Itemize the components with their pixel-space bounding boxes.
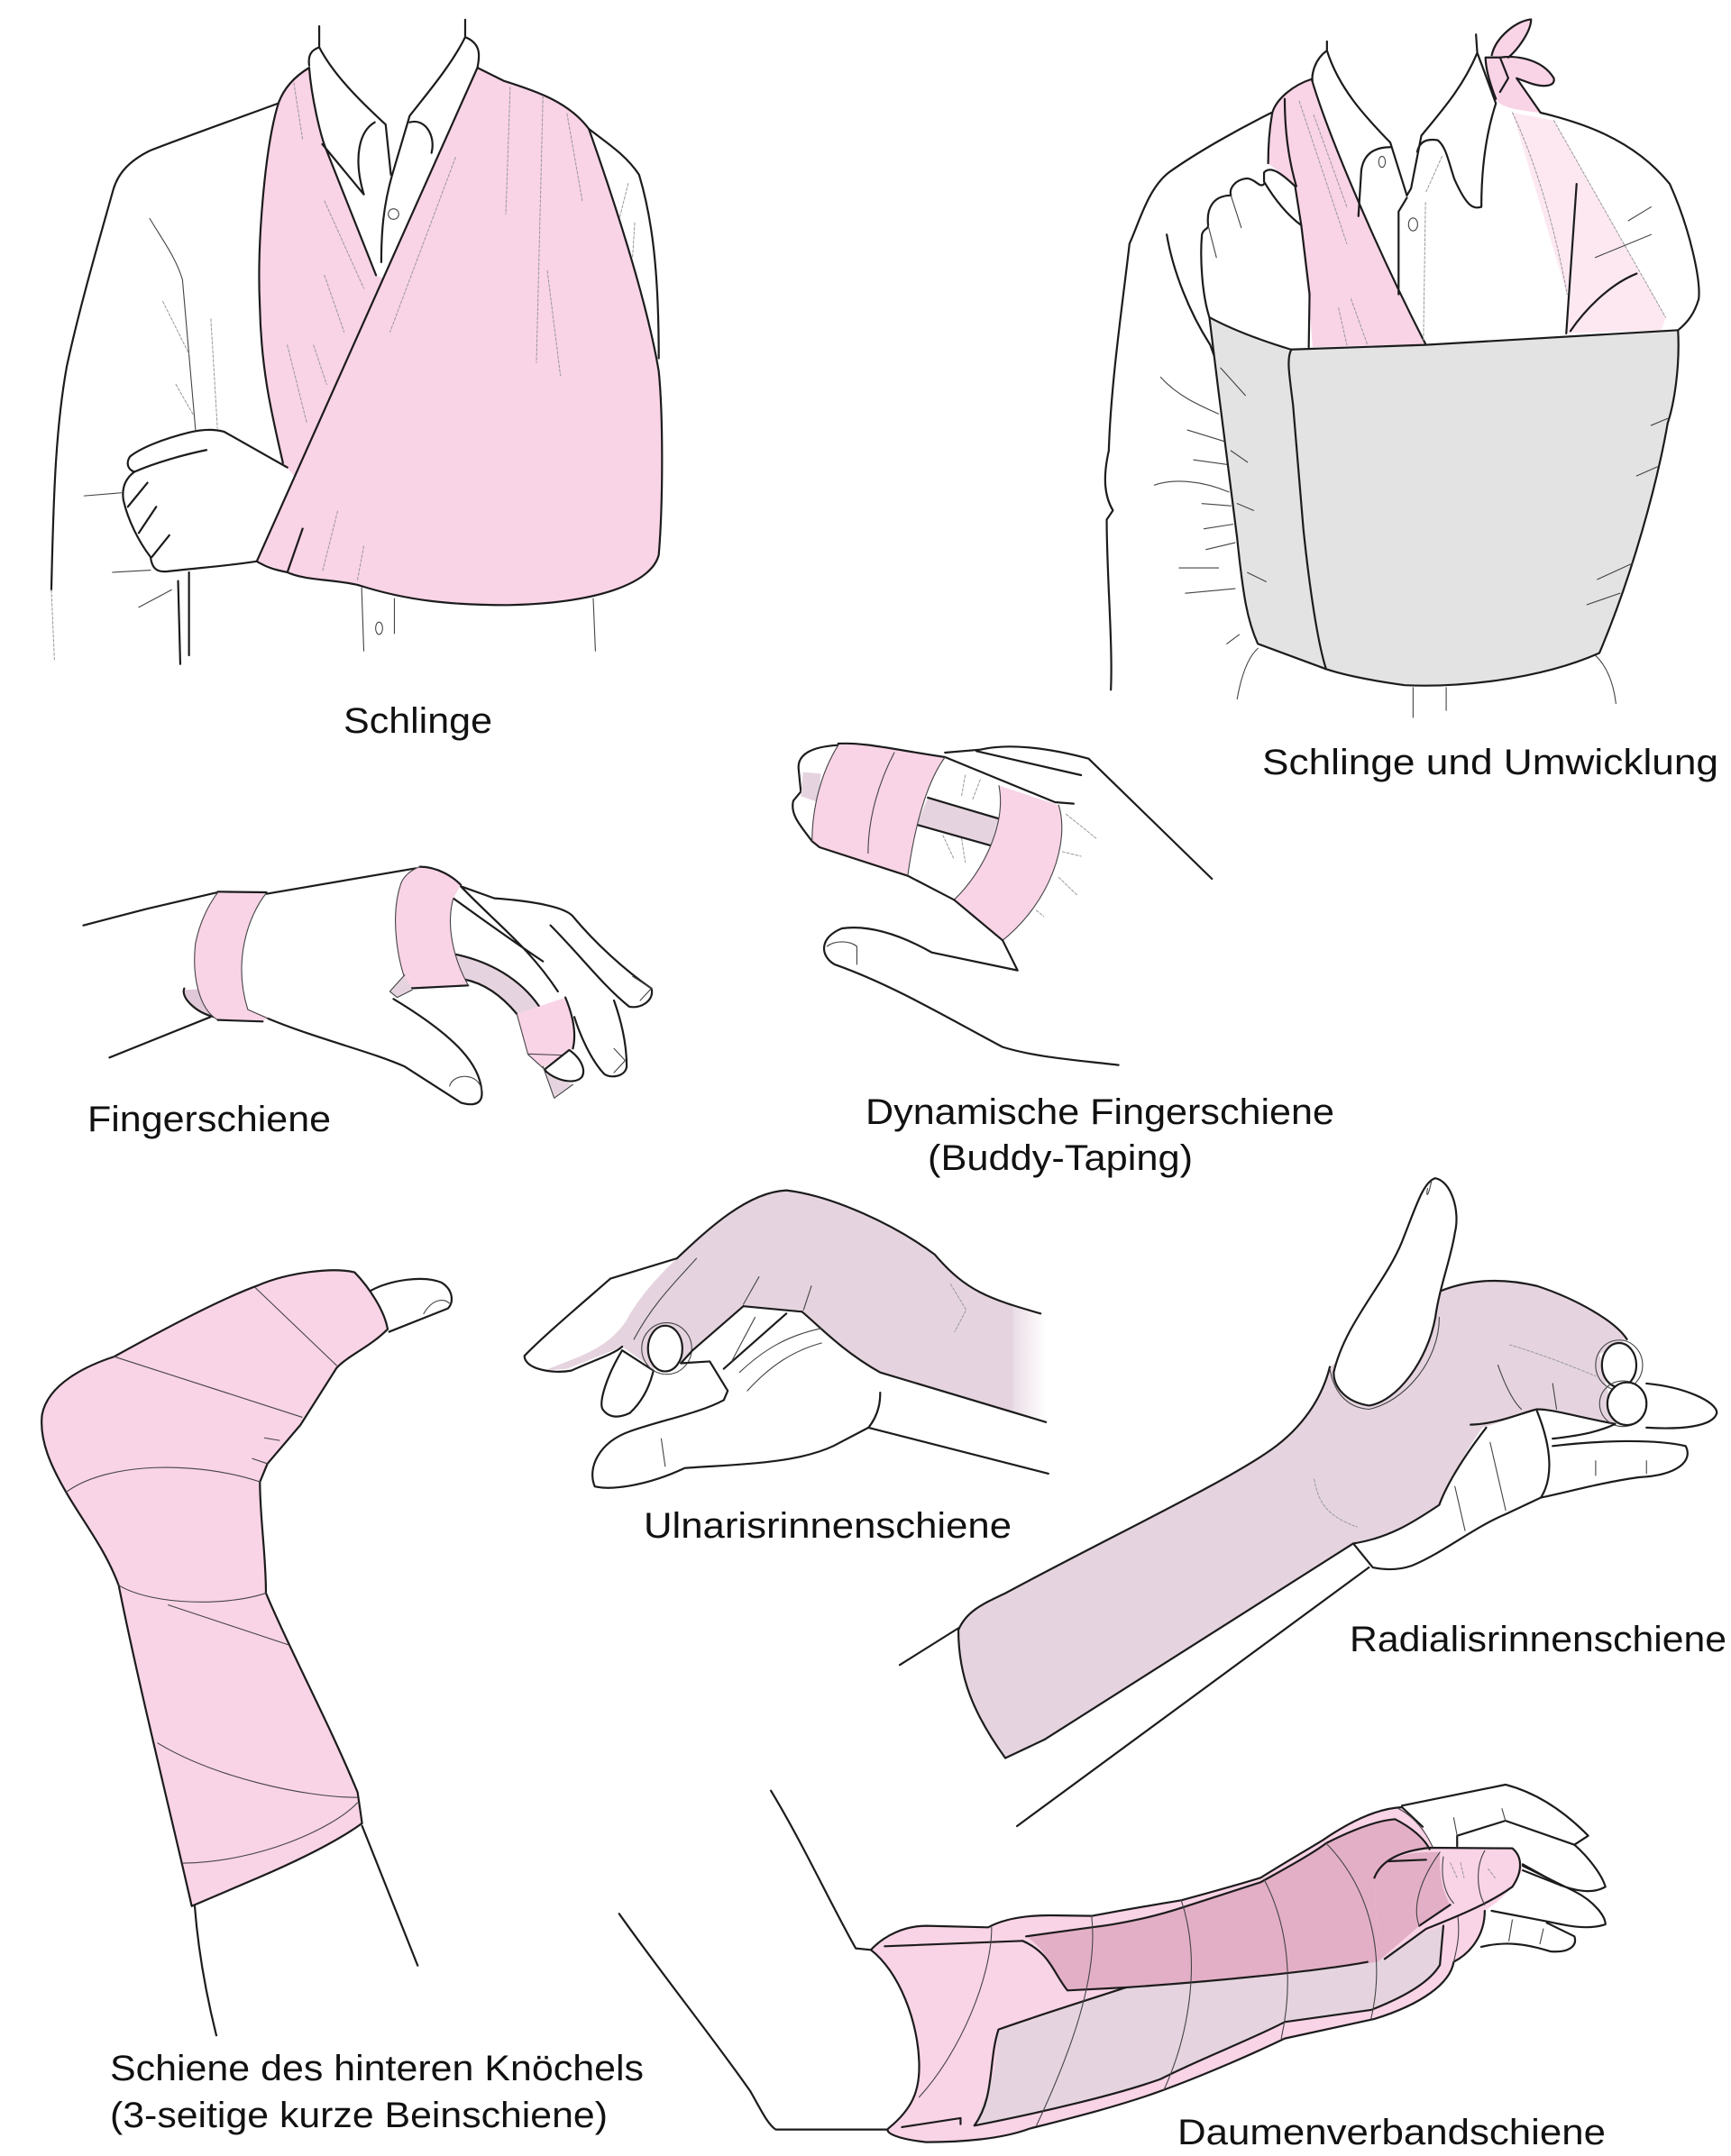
- hand strap and finger splint: [389, 867, 583, 1098]
- label: Buddy-Taping: (Buddy-Taping): [928, 1138, 1193, 1178]
- leg lines: [195, 1826, 417, 2035]
- label: Radialisrinnenschiene: Radialisrinnenschiene: [1350, 1620, 1726, 1659]
- label: Schlinge: Schlinge: [343, 701, 492, 741]
- fingers: [1402, 1785, 1606, 1951]
- fingers and palm: [1353, 1340, 1717, 1569]
- figure: Schlinge und Umwicklung: [1105, 19, 1699, 717]
- wrap bandage: [1209, 317, 1679, 686]
- thumb: [1330, 1178, 1457, 1409]
- shirt collar and torso outline: [51, 20, 659, 664]
- figure: Radialisrinnenschiene: [900, 1178, 1717, 1826]
- icon: hand: [84, 430, 288, 608]
- arm lines: [619, 1791, 888, 2130]
- wrist strap: [184, 891, 268, 1021]
- figure: Ulnarisrinnenschiene: [525, 1191, 1049, 1488]
- figure: Daumenverbandschiene: [619, 1785, 1606, 2142]
- label: Schlinge und Umwicklung: Schlinge und Umwicklung: [1262, 743, 1718, 782]
- figure: Schlinge: [51, 20, 662, 664]
- foot and ankle bandage: [41, 1270, 388, 1906]
- icon: fist: [1201, 169, 1310, 347]
- figure: Fingerschiene: [83, 867, 652, 1104]
- gutter splint: [958, 1281, 1627, 1758]
- spica splint: [871, 1807, 1523, 2142]
- figure: Buddy-Taping: [792, 744, 1212, 1065]
- hand outline: [525, 1258, 1049, 1488]
- body and shirt outline: [1105, 34, 1699, 717]
- hand outline: [83, 868, 652, 1104]
- sling fabric: [257, 68, 662, 605]
- figure: Schiene des hinteren Knöchels: [41, 1270, 452, 2035]
- label: Daumenverbandschiene: Daumenverbandschiene: [1177, 2113, 1606, 2152]
- label: Dynamische Fingerschiene: Dynamische Fingerschiene: [866, 1092, 1334, 1132]
- buddy tape bands: [812, 744, 1062, 940]
- gutter splint: [544, 1191, 1046, 1423]
- hand outline: [792, 745, 1212, 1065]
- label: Schiene des hinteren Knöchels: Schiene des hinteren Knöchels: [110, 2049, 644, 2088]
- label: 3-seitige kurze Beinschiene: (3-seitige kurze Beinschiene): [110, 2096, 608, 2135]
- label: Ulnarisrinnenschiene: Ulnarisrinnenschiene: [644, 1506, 1012, 1546]
- label: Fingerschiene: Fingerschiene: [87, 1100, 331, 1139]
- forearm lines: [900, 1567, 1369, 1826]
- thumb piece: [1374, 1848, 1520, 1959]
- sling fabric and knot: [1268, 19, 1665, 347]
- toe: [371, 1279, 452, 1332]
